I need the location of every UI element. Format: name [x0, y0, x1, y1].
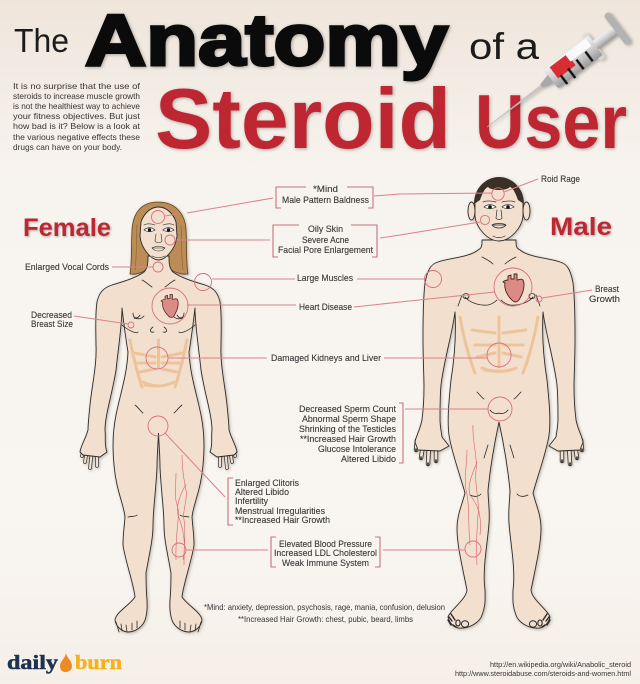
- intro text: drugs can have on your body.: [13, 142, 122, 152]
- callout: breast growth: Breast: [595, 284, 619, 295]
- male facial features: [483, 201, 515, 238]
- intro text: [13, 81, 141, 152]
- callout: skin: [165, 215, 490, 257]
- callout: male reproductive effects: Shrinking of the Testicles: [299, 424, 396, 435]
- male leg veins: [465, 425, 481, 565]
- icon: male heart: [503, 274, 524, 302]
- title: of a: [469, 26, 539, 67]
- heading: Female: Female: [23, 214, 111, 242]
- callout: heart disease: Heart Disease: [299, 302, 352, 313]
- callout: breast growth: [536, 284, 620, 305]
- female hair strands: [135, 225, 183, 270]
- female leg veins: [175, 455, 186, 565]
- logo: daily burn: daily: [7, 652, 58, 674]
- callout: heart disease: [152, 268, 532, 324]
- footnotes: [204, 602, 445, 624]
- figure: female body: [80, 202, 237, 632]
- sources: http://en.wikipedia.org/wiki/Anabolic_steroid: [490, 660, 631, 669]
- male ears: [468, 202, 530, 220]
- female face: [140, 207, 177, 260]
- callout: female reproductive effects: Altered Libido: [235, 487, 289, 498]
- figure: male body: [415, 177, 583, 628]
- callout: skin: Oily Skin: [308, 224, 343, 235]
- callout: mind and baldness: *Mind: [313, 184, 338, 195]
- callout: female reproductive effects: **Increased Hair Growth: [235, 515, 330, 526]
- callout: male reproductive effects: [299, 397, 512, 465]
- title: Steroid: [155, 72, 451, 167]
- callout: blood pressure: Elevated Blood Pressure: [279, 539, 372, 550]
- callout: male reproductive effects: Abnormal Sperm Shape: [302, 414, 396, 425]
- callout: blood pressure: [172, 537, 481, 569]
- callout: large muscles: [194, 270, 442, 290]
- male left half: [415, 240, 513, 628]
- callout: breast growth: Growth: [589, 294, 620, 305]
- intro text: is not the healthiest way to achieve: [13, 101, 140, 111]
- icon: female heart: [161, 295, 178, 317]
- female right half: [145, 256, 237, 632]
- callout: male reproductive effects: Glucose Intolerance: [318, 444, 396, 455]
- callout: female reproductive effects: Menstrual Irregularities: [235, 506, 325, 517]
- callout: vocal cords: Enlarged Vocal Cords: [25, 262, 109, 273]
- intro text: It is no surprise that the use of: [13, 81, 141, 91]
- callout: male reproductive effects: **Increased Hair Growth: [300, 434, 396, 445]
- icon: flame: [60, 653, 72, 672]
- callout: skin: Facial Pore Enlargement: [278, 245, 373, 256]
- female hair: [130, 202, 188, 274]
- title: [14, 1, 627, 167]
- title: Anatomy: [85, 1, 448, 81]
- intro text: the various negative effects these: [13, 132, 140, 142]
- female abdomen centre line: [157, 340, 160, 367]
- callout: kidneys and liver: Damaged Kidneys and Liver: [271, 353, 381, 364]
- icon: syringe: [476, 11, 632, 142]
- male right half: [485, 240, 583, 628]
- female left half: [80, 256, 172, 632]
- callout: skin: Severe Acne: [302, 235, 349, 246]
- female facial features: [144, 224, 174, 258]
- heading: Male: Male: [550, 213, 612, 241]
- male abdomen centre line: [498, 317, 500, 367]
- sources: http://www.steroidabuse.com/steroids-and-women.html: [455, 669, 631, 678]
- callout: decreased breast size: Breast Size: [31, 319, 73, 330]
- callout: vocal cords: [25, 262, 163, 273]
- logo: daily burn: [7, 652, 122, 674]
- callout: female reproductive effects: Infertility: [235, 496, 268, 507]
- intro text: how bad is it? Below is a look at: [13, 121, 141, 131]
- callout: blood pressure: Increased LDL Cholesterol: [274, 548, 377, 559]
- callout: decreased breast size: Decreased: [31, 310, 72, 321]
- callout: blood pressure: Weak Immune System: [282, 558, 369, 569]
- male hair: [474, 177, 524, 204]
- callout: large muscles: Large Muscles: [297, 273, 353, 284]
- callout: female reproductive effects: [148, 416, 330, 526]
- callout: mind and baldness: Male Pattern Baldness: [282, 195, 369, 206]
- sources: [455, 660, 631, 678]
- logo: daily burn: burn: [75, 652, 122, 674]
- title: User: [475, 80, 627, 165]
- callout: mind and baldness: [152, 179, 538, 224]
- callout: kidneys and liver: [146, 343, 511, 369]
- intro text: steroids to increase muscle growth: [13, 91, 140, 101]
- callout: male reproductive effects: Altered Libido: [341, 454, 396, 465]
- callout: decreased breast size: [31, 310, 134, 330]
- title: The: [14, 22, 69, 59]
- intro text: your fitness objectives. But just: [13, 111, 141, 121]
- callout: male reproductive effects: Decreased Sperm Count: [299, 404, 396, 415]
- callout: female reproductive effects: Enlarged Clitoris: [235, 478, 299, 489]
- footnotes: **Increased Hair Growth: chest, pubic, beard, limbs: [238, 614, 413, 624]
- male face: [475, 180, 523, 241]
- label: Roid Rage: Roid Rage: [541, 174, 580, 185]
- footnotes: *Mind: anxiety, depression, psychosis, rage, mania, confusion, delusion: [204, 602, 445, 612]
